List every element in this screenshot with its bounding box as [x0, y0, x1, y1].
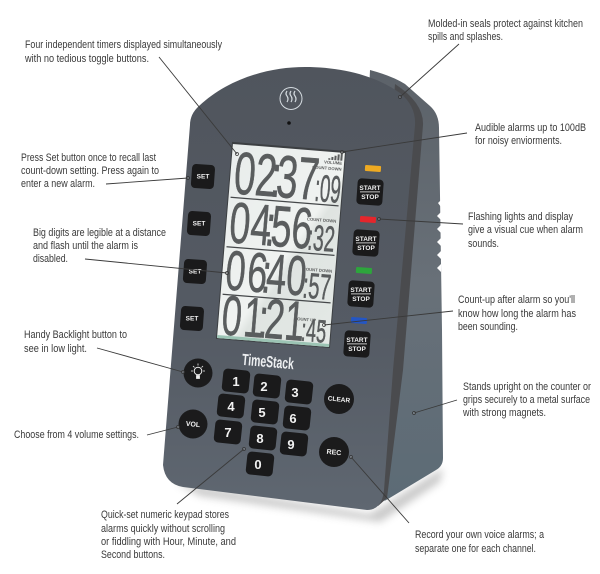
timer 1: :09	[313, 167, 343, 212]
set buttons: SET	[186, 316, 198, 322]
timer 4: :45	[300, 312, 328, 350]
timer 1: 02:37	[232, 139, 322, 213]
timer 4: 01:21	[220, 283, 307, 353]
timer 3: :57	[301, 265, 333, 308]
set buttons: SET	[193, 220, 205, 228]
brand name: TimeStack	[241, 352, 295, 373]
timer 2: COUNT DOWN	[307, 216, 337, 224]
start stop buttons: START	[359, 185, 381, 192]
volume button: VOL	[185, 421, 201, 429]
callout: set button	[21, 152, 190, 190]
timer 1: COUNT DOWN	[312, 164, 342, 172]
callout: set button: enter a new alarm.	[21, 178, 95, 190]
start stop buttons: START	[346, 337, 368, 344]
timer 1: VOLUME	[324, 159, 342, 166]
numeric keypad: 0	[254, 457, 262, 472]
numeric keypad: 1	[232, 374, 240, 389]
callout: big digits	[33, 227, 228, 274]
numeric keypad: 9	[287, 437, 295, 452]
callout: big digits: disabled.	[33, 253, 68, 265]
logo	[280, 88, 302, 110]
clear button	[324, 384, 354, 414]
callout: volume: Choose from 4 volume settings.	[14, 429, 139, 441]
callout: flashing lights: Flashing lights and display	[468, 211, 573, 223]
numeric keypad: 3	[291, 385, 299, 400]
callout: four timers: with no tedious toggle buttons.	[24, 53, 149, 65]
callout: keypad: alarms quickly without scrolling	[101, 523, 225, 535]
volume bars	[328, 153, 343, 161]
set buttons	[180, 164, 215, 331]
start stop buttons: STOP	[361, 194, 379, 201]
callout: four timers	[24, 39, 238, 156]
callout: flashing lights	[378, 211, 583, 250]
numeric keypad: 6	[289, 411, 297, 426]
device shadow	[175, 468, 443, 522]
numeric keypad: 4	[227, 399, 235, 414]
start stop buttons: STOP	[352, 296, 370, 303]
callout: keypad: Second buttons.	[101, 549, 165, 561]
start stop buttons: STOP	[357, 245, 375, 252]
volume button	[178, 410, 208, 438]
side vents	[437, 200, 441, 272]
callout: four timers: Four independent timers displayed simultaneously	[25, 39, 222, 51]
microphone hole	[287, 121, 291, 125]
indicator lights	[351, 165, 381, 324]
timer 3: COUNT DOWN	[303, 266, 332, 274]
callout: voice alarms: separate one for each channel.	[415, 543, 536, 555]
callout: backlight	[24, 329, 184, 374]
start stop buttons: START	[350, 287, 372, 294]
callout: keypad	[101, 448, 246, 561]
record button	[319, 437, 349, 467]
callout: magnets: with strong magnets.	[462, 407, 546, 419]
timer 4: COUNT UP	[294, 316, 316, 323]
callout: voice alarms: Record your own voice alarms; a	[415, 529, 545, 541]
start stop buttons	[343, 178, 384, 358]
callout: molded seals: spills and splashes.	[428, 31, 503, 43]
numeric keypad: 5	[258, 405, 266, 420]
callout: set button: count-down setting. Press again to	[21, 165, 159, 177]
LCD screen	[215, 138, 346, 355]
timer 3: 06:40	[223, 238, 309, 308]
front face	[163, 67, 415, 510]
callout: flashing lights: sounds.	[468, 238, 499, 250]
callout: keypad: or fiddling with Hour, Minute, and	[101, 536, 236, 548]
record button: REC	[326, 449, 342, 457]
start stop buttons: START	[355, 236, 377, 243]
numeric keypad: 8	[256, 431, 264, 446]
callout: molded seals	[398, 18, 583, 98]
backlight button	[184, 358, 212, 388]
callout: magnets	[412, 381, 591, 419]
callout: backlight: see in low light.	[24, 343, 87, 355]
device: timer body	[163, 67, 443, 510]
callout: count-up: Count-up after alarm so you'll	[458, 294, 575, 306]
seal band	[378, 84, 423, 506]
callout: big digits: Big digits are legible at a distance	[33, 227, 166, 239]
set buttons: SET	[189, 268, 201, 276]
callout: set button: Press Set button once to recall last	[21, 152, 156, 164]
numeric keypad: 7	[224, 425, 232, 440]
start stop buttons: STOP	[348, 346, 366, 353]
callout: audible alarms: for noisy enviorments.	[475, 135, 562, 147]
callout: count-up	[322, 294, 576, 333]
callout: count-up: know how long the alarm has	[458, 308, 576, 320]
timer 2: 04:56	[227, 191, 315, 262]
callout: keypad: Quick-set numeric keypad stores	[101, 509, 229, 521]
callout: count-up: been sounding.	[458, 321, 518, 333]
numeric keypad	[213, 368, 314, 477]
callout: audible alarms	[340, 122, 586, 154]
callout: backlight: Handy Backlight button to	[24, 329, 127, 341]
numeric keypad: 2	[260, 379, 268, 394]
callout: voice alarms	[350, 456, 545, 555]
set buttons: SET	[197, 174, 209, 180]
timer 2: :32	[306, 217, 336, 260]
callout: big digits: and flash until the alarm is	[33, 240, 138, 252]
clear button: CLEAR	[327, 395, 351, 405]
device side panel	[360, 70, 443, 501]
